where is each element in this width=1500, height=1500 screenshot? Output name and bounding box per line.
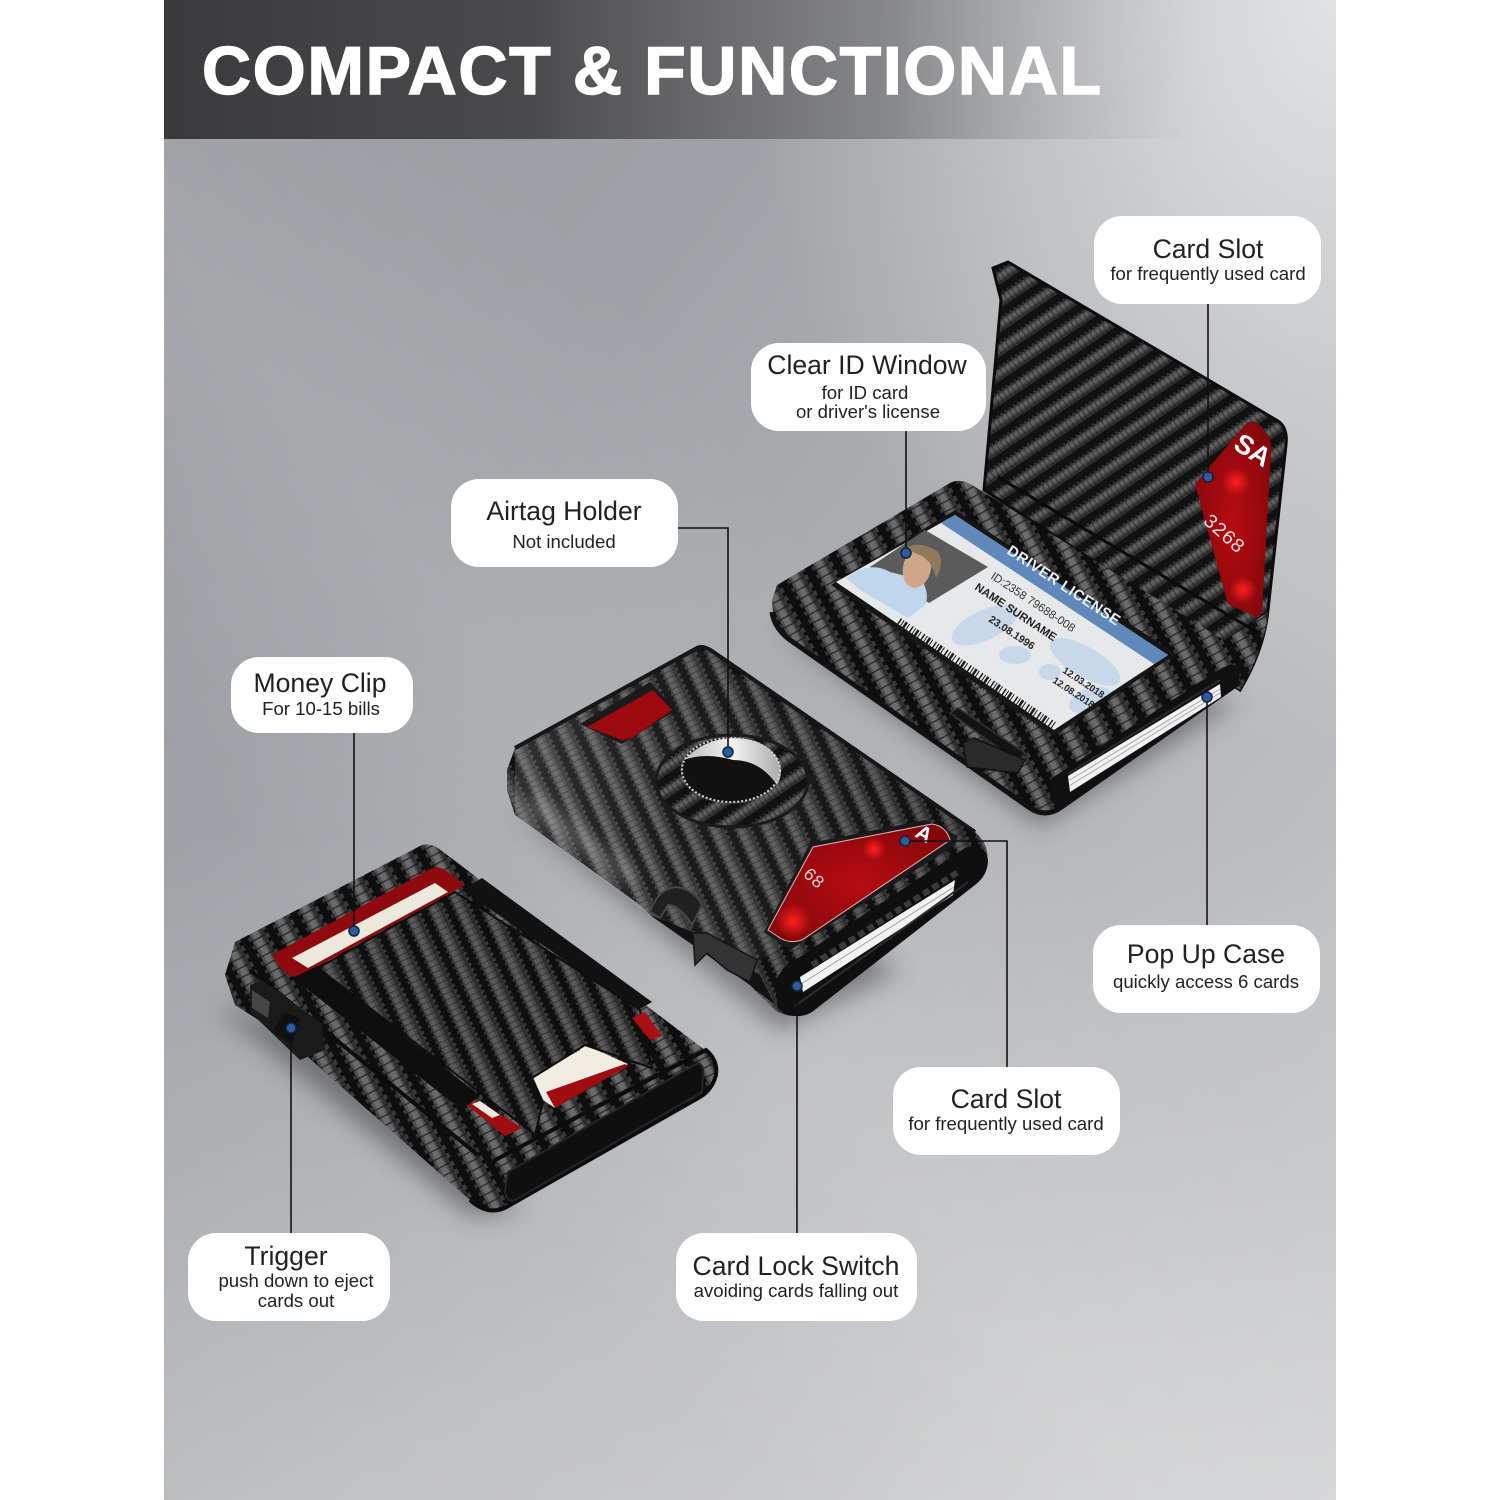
callout: card lock switch: Card Lock Switch (693, 1251, 899, 1281)
flap card slot: red card: SA (1229, 428, 1277, 473)
callout: clear ID window: for ID card (822, 382, 908, 403)
wallet base (772, 481, 1240, 813)
callout: card lock switch (676, 1233, 917, 1321)
airtag holder (656, 735, 808, 827)
callout: card lock switch: avoiding cards falling out (694, 1280, 899, 1301)
leader line: money clip (349, 733, 359, 936)
callout: airtag holder: Not included (512, 531, 616, 552)
wallet shadow (780, 630, 1240, 825)
leader line: card lock switch (792, 981, 802, 1233)
callout: clear ID window: Clear ID Window (767, 350, 968, 380)
trigger mechanism (250, 980, 325, 1060)
callout: trigger: cards out (258, 1290, 335, 1311)
callout: airtag holder: Airtag Holder (486, 496, 642, 526)
driver license text: DRIVER LICENSE (1004, 542, 1123, 629)
date of birth: 23.08.1996 (986, 613, 1037, 653)
upper black strap (462, 878, 652, 1010)
black lower frame (250, 970, 716, 1210)
callout: card slot top (1094, 216, 1321, 304)
leader line: card slot top (1203, 304, 1213, 482)
wallet body (507, 647, 988, 1016)
callout: card slot lower: Card Slot (951, 1084, 1062, 1114)
red card slot (764, 820, 958, 950)
clip plate (318, 892, 652, 1135)
wallet: open with ID window (772, 262, 1286, 825)
wallet shadow (515, 810, 900, 1030)
title: COMPACT & FUNCTIONAL (202, 33, 1101, 109)
end slot (505, 1064, 703, 1201)
lower slot cards (532, 1045, 628, 1108)
base lower edge (772, 612, 1240, 813)
callout: pop up case (1093, 925, 1320, 1013)
small red card piece (467, 1012, 662, 1136)
card lock switch (950, 708, 1025, 773)
callout: airtag holder (451, 479, 678, 567)
flap card slot: red card: 3268 (1197, 510, 1248, 559)
lower black strap (293, 966, 480, 1110)
leader line: airtag holder (678, 528, 733, 757)
callout: card slot lower: for frequently used card (908, 1113, 1104, 1134)
callout: card slot top: for frequently used card (1110, 263, 1306, 284)
pop-up end frame with cards (775, 846, 988, 1016)
lock band (650, 915, 775, 1005)
callout: money clip: For 10-15 bills (262, 698, 380, 719)
world map (952, 604, 1120, 714)
name: NAME SURNAME (972, 581, 1059, 644)
callout: clear ID window (751, 343, 986, 431)
leader line: card slot lower (900, 836, 1007, 1067)
small red card corner (580, 682, 676, 744)
issue dates: 12.03.2018 (1060, 665, 1106, 701)
issue dates: 12.08.2018 (1050, 675, 1096, 711)
portrait (846, 530, 988, 618)
card lock switch (693, 933, 757, 982)
red card top (272, 868, 465, 977)
license header strip (941, 515, 1168, 664)
callout: card slot lower (893, 1067, 1120, 1155)
trigger arc (650, 887, 702, 925)
barcode (897, 624, 1052, 728)
wallet: money clip back (215, 844, 716, 1215)
header band (164, 0, 1204, 139)
wallet shadow (215, 1005, 520, 1215)
ID number: ID:2358 79688-008 (988, 570, 1077, 635)
callout: money clip: Money Clip (253, 668, 387, 698)
open flap (984, 262, 1286, 690)
background panel (164, 0, 1336, 1500)
callout: money clip (231, 657, 413, 733)
pop-up slot with cards (1050, 665, 1240, 806)
wallet: AirTag holder (507, 647, 988, 1030)
ID window (831, 510, 1176, 736)
flap card slot: red card (1195, 422, 1277, 617)
leader line: clear ID window (901, 431, 911, 558)
callout: card slot top: Card Slot (1153, 234, 1264, 264)
callout: clear ID window: or driver's license (796, 401, 940, 422)
sheen (515, 648, 975, 960)
wallet body (225, 844, 716, 1210)
callout: pop up case: quickly access 6 cards (1113, 971, 1299, 992)
callout: trigger (188, 1233, 390, 1321)
callout: trigger: Trigger (244, 1241, 328, 1271)
issue dates (1050, 665, 1106, 711)
callout: pop up case: Pop Up Case (1127, 939, 1285, 969)
outer edge (515, 647, 975, 832)
red card slot: A (912, 820, 936, 848)
callout: trigger: push down to eject (218, 1270, 374, 1291)
light reflection (525, 790, 640, 885)
leader line: pop up case (1202, 692, 1212, 925)
leader line: trigger (286, 1023, 296, 1233)
red card slot: 68 (798, 865, 827, 894)
